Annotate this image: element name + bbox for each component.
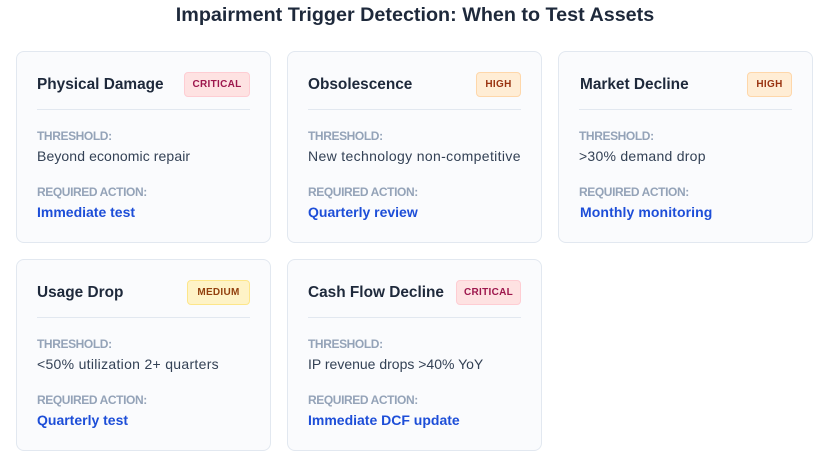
severity badge <box>184 72 250 97</box>
action label: REQUIRED ACTION: <box>308 185 418 199</box>
severity badge <box>187 280 250 305</box>
panel: market decline <box>558 51 813 243</box>
action label: REQUIRED ACTION: <box>37 185 147 199</box>
threshold value: IP revenue drops >40% YoY <box>308 356 483 372</box>
action label: REQUIRED ACTION: <box>308 393 418 407</box>
action value: Quarterly test <box>37 412 128 428</box>
threshold value: >30% demand drop <box>579 148 706 164</box>
action label: REQUIRED ACTION: <box>579 185 689 199</box>
severity badge: HIGH <box>485 79 512 90</box>
title: Impairment Trigger Detection: When to Test Assets <box>176 4 654 26</box>
card heading: Usage Drop <box>37 284 123 301</box>
action value: Immediate test <box>37 204 135 220</box>
action value: Quarterly review <box>308 204 418 220</box>
card heading: Physical Damage <box>37 76 164 93</box>
threshold label: THRESHOLD: <box>579 129 654 143</box>
severity badge <box>476 72 521 97</box>
threshold value: New technology non-competitive <box>308 148 521 164</box>
threshold value: Beyond economic repair <box>37 148 190 164</box>
severity badge: CRITICAL <box>464 287 513 298</box>
action value: Immediate DCF update <box>308 412 460 428</box>
severity badge <box>456 280 521 305</box>
threshold label: THRESHOLD: <box>37 129 112 143</box>
panel: obsolescence <box>287 51 542 243</box>
card heading: Cash Flow Decline <box>308 284 444 301</box>
severity badge <box>747 72 792 97</box>
threshold label: THRESHOLD: <box>308 129 383 143</box>
action label: REQUIRED ACTION: <box>37 393 147 407</box>
panel: physical damage <box>16 51 271 243</box>
severity badge: CRITICAL <box>192 79 242 90</box>
threshold label: THRESHOLD: <box>308 337 383 351</box>
threshold label: THRESHOLD: <box>37 337 112 351</box>
threshold value: <50% utilization 2+ quarters <box>37 356 219 372</box>
severity badge: HIGH <box>756 79 783 90</box>
action value: Monthly monitoring <box>580 204 712 220</box>
severity badge: MEDIUM <box>197 287 240 298</box>
panel: cash flow decline <box>287 259 542 451</box>
panel: usage drop <box>16 259 271 451</box>
card heading: Market Decline <box>580 76 689 93</box>
card heading: Obsolescence <box>308 76 412 93</box>
